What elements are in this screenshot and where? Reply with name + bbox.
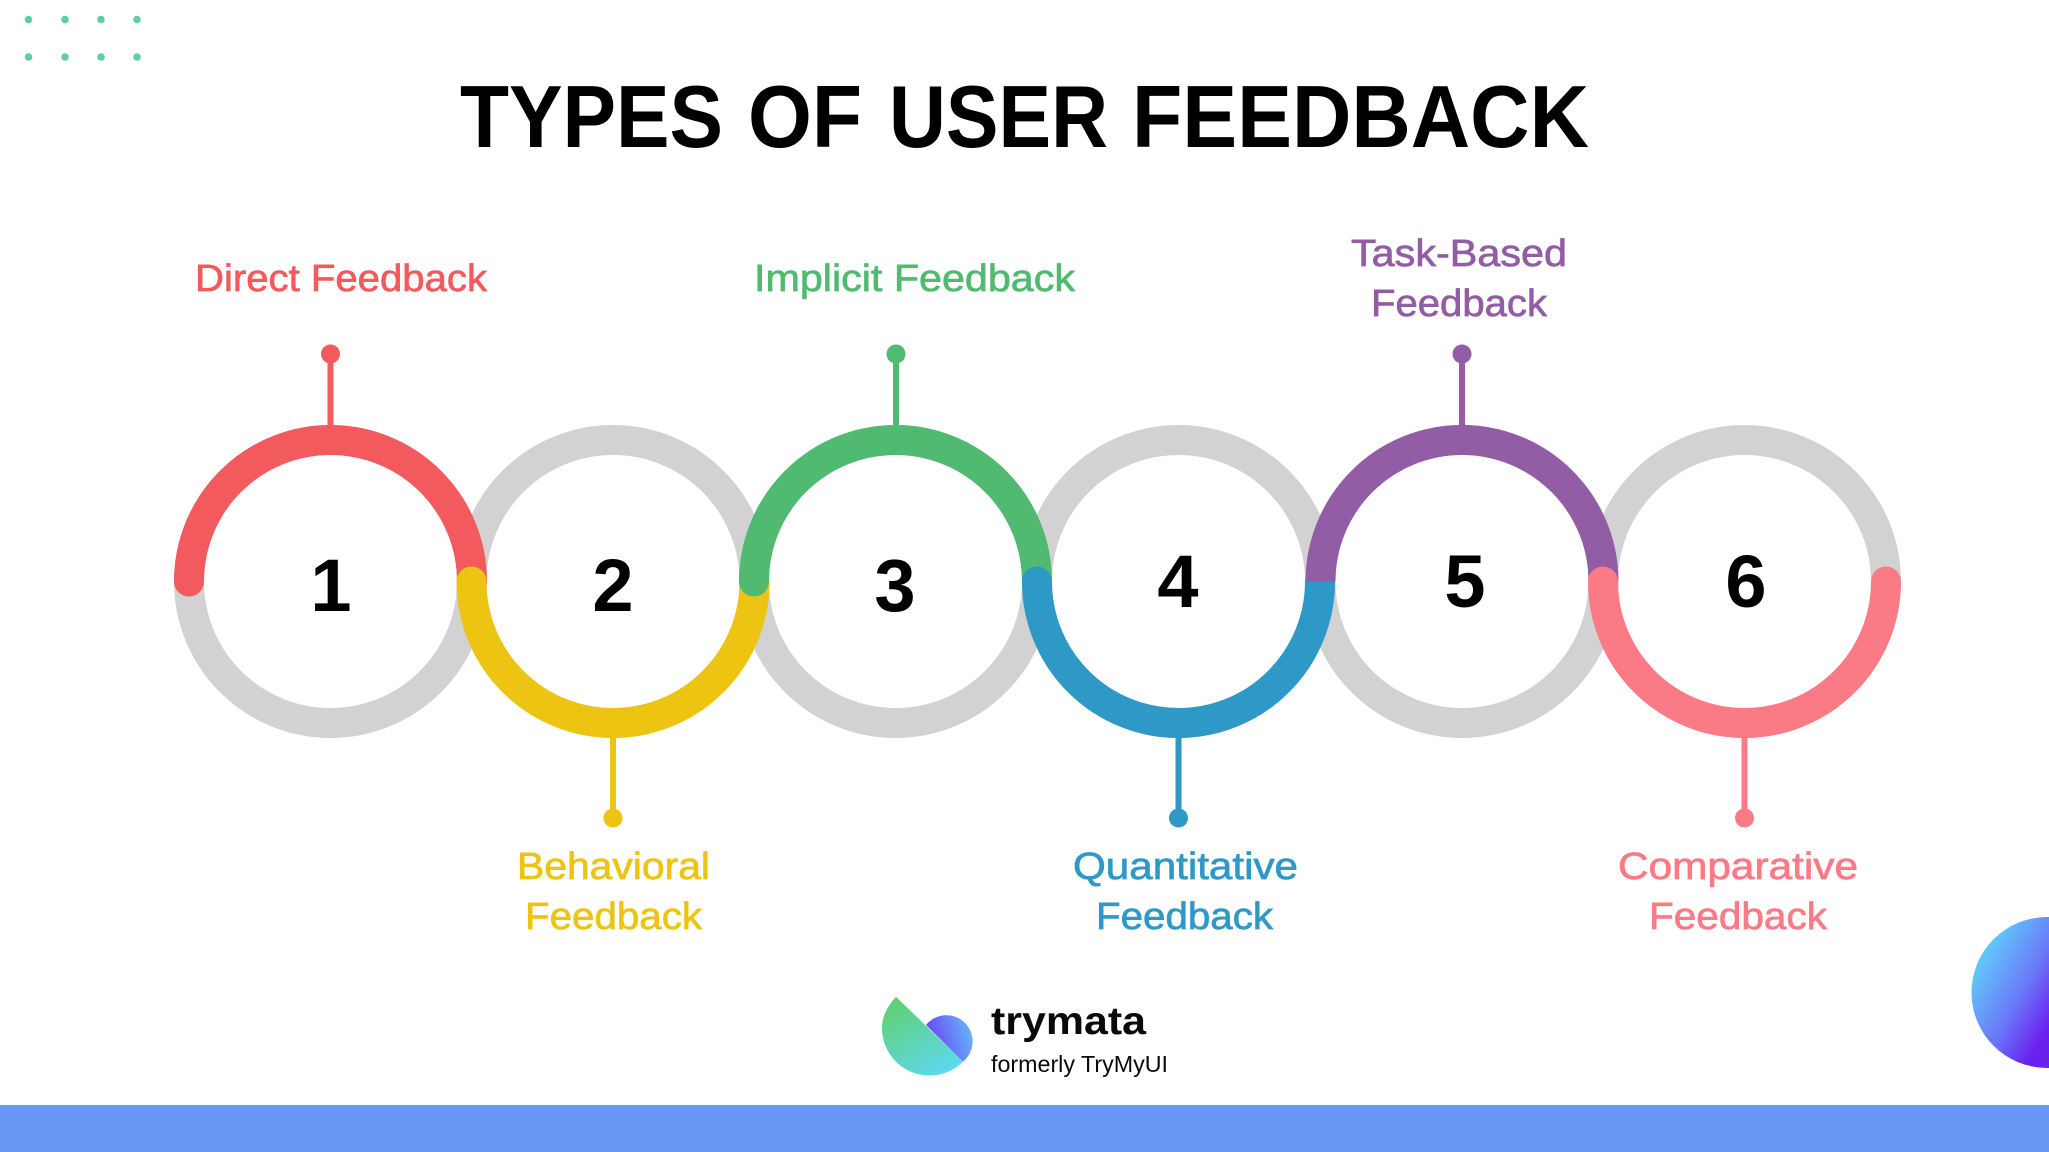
decorative dots grid [25, 16, 141, 61]
logo: trymata mark [882, 997, 973, 1076]
step 2: behavioral feedback arc and pin [472, 582, 754, 828]
title: TYPES [460, 67, 723, 166]
bottom bar [0, 1105, 2049, 1152]
logo wordmark: trymata [991, 1000, 1146, 1043]
step 5: task-based feedback arc and pin [1320, 344, 1604, 582]
label: comparative feedback: Comparative [1618, 846, 1858, 888]
title: USER [889, 67, 1108, 166]
step 6: comparative feedback arc and pin [1603, 582, 1886, 828]
label: behavioral feedback: Feedback [525, 896, 703, 938]
number 2: 2 [592, 544, 634, 627]
logo subtitle: formerly TryMyUI [991, 1051, 1168, 1077]
title: OF [748, 67, 862, 166]
label: implicit feedback: Implicit Feedback [754, 258, 1076, 300]
title: FEEDBACK [1132, 67, 1589, 166]
label: behavioral feedback: Behavioral [517, 846, 710, 888]
step 3: implicit feedback arc and pin [754, 344, 1037, 582]
label: quantitative feedback: Quantitative [1073, 846, 1298, 888]
label: direct feedback: Direct Feedback [195, 258, 488, 300]
number 4: 4 [1157, 540, 1199, 623]
label: comparative feedback: Feedback [1649, 896, 1828, 938]
number 5: 5 [1444, 540, 1486, 623]
step 4: quantitative feedback arc and pin [1037, 582, 1320, 828]
step 1: direct feedback arc and pin [189, 344, 472, 582]
decorative gradient circle [1972, 917, 2049, 1068]
number 1: 1 [310, 544, 352, 627]
number 6: 6 [1725, 540, 1767, 623]
number 3: 3 [874, 544, 916, 627]
label: task-based feedback: Feedback [1371, 283, 1548, 325]
label: quantitative feedback: Feedback [1096, 896, 1274, 938]
gray base rings [189, 440, 1886, 723]
label: task-based feedback: Task-Based [1351, 233, 1567, 275]
